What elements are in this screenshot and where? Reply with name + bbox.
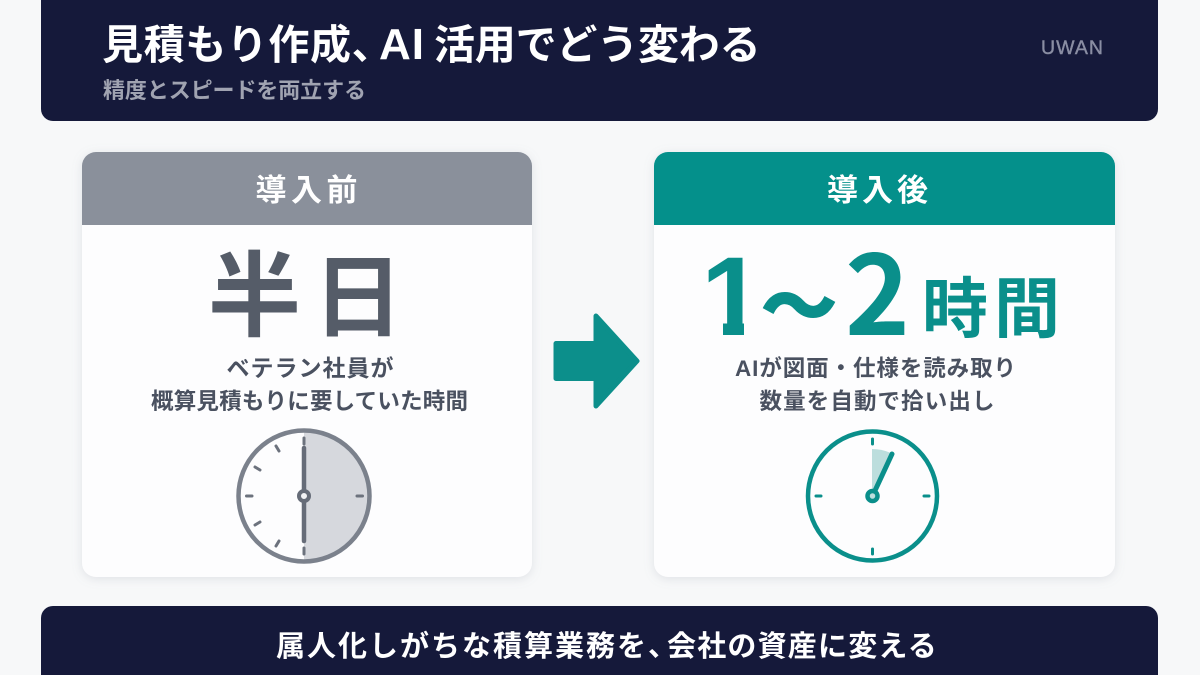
header banner [41,0,1158,121]
description: after: 数量を自動で拾い出し [760,389,994,414]
arrow [556,316,637,406]
big value: 1-2 hours: 2 [845,207,910,367]
description: after [735,355,1016,414]
icon: clock 1-2 hours [808,432,937,560]
description: after: AIが図面・仕様を読み取り [735,355,1016,381]
title: 活用でどう変わる [434,22,760,68]
big value: 1-2 hours: 1 [701,234,763,359]
description: before: 概算見積もりに要していた時間 [151,389,468,414]
footer banner [41,606,1158,675]
brand label: UWAN [1041,37,1103,59]
panel header: after: 導入後 [827,173,928,208]
description: before: ベテラン社員が [226,355,394,381]
big value: half day: 日 [313,249,403,349]
big value: half day [208,245,403,349]
description: before [151,355,468,414]
panel header: before [82,152,532,225]
footer message: 属人化しがちな積算業務を、 [276,629,679,663]
big value: 1-2 hours: 時間 [922,272,1060,346]
title: AI [379,20,425,69]
big value: 1-2 hours [708,252,1056,338]
panel header: after [654,152,1115,225]
panel: after [654,152,1115,577]
subtitle: 精度とスピードを両立する [103,78,366,103]
footer message: 会社の資産に変える [667,630,938,663]
icon: clock half day [238,430,370,562]
panel: before [82,152,532,577]
panel header: before: 導入前 [256,173,358,208]
big value: half day: 半 [208,245,301,349]
big value: 1-2 hours: 〜 [762,248,836,355]
title: 見積もり作成、 [102,22,393,68]
